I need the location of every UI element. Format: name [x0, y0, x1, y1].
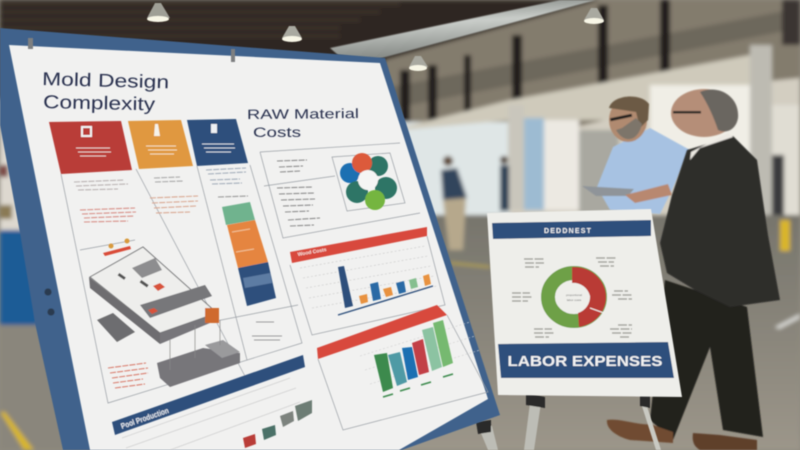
- clipboard and arm: [582, 186, 634, 196]
- pale blue wall section: [400, 122, 510, 222]
- card: red: [49, 121, 132, 174]
- bar chart: material costs: [290, 227, 437, 315]
- stacked bar: [222, 202, 276, 306]
- easel legs: [476, 393, 661, 450]
- column text placeholders: [74, 160, 320, 388]
- donut chart: labor costs: [567, 298, 582, 302]
- shirt: [597, 128, 690, 214]
- card: blue: [187, 119, 248, 166]
- panel: bottom production band: Pool Production: [120, 406, 170, 431]
- poster sheet: [9, 45, 488, 450]
- mini bar chart: [243, 400, 312, 448]
- ceiling: [0, 0, 800, 120]
- left side wall and blue table: [0, 100, 100, 450]
- head: [671, 89, 737, 137]
- heading: raw material costs: Costs: [253, 125, 301, 140]
- yellow bollard: [780, 220, 790, 251]
- sign title bar: [498, 342, 674, 378]
- board clips: [28, 38, 235, 62]
- column guide lines: [61, 143, 488, 430]
- board frame: [0, 28, 500, 450]
- donut chart: [548, 267, 606, 327]
- back wall with dark beams: [385, 0, 800, 170]
- isometric mold diagram: [89, 238, 282, 387]
- flower diagram: [340, 153, 397, 210]
- panel: labor expenses sign: [487, 209, 682, 397]
- jacket: [660, 136, 780, 307]
- ceiling duct: [330, 0, 596, 60]
- card: orange: [128, 120, 193, 169]
- heading: mold design complexity: [42, 68, 169, 114]
- head: [609, 98, 647, 142]
- sign title bar: LABOR EXPENSES: [508, 354, 663, 370]
- donut chart: proportional: [566, 293, 582, 297]
- shoes: [607, 420, 673, 443]
- right man in dark suit: [607, 89, 780, 450]
- ceiling lamps: [147, 3, 604, 71]
- left man in blue shirt: [582, 96, 690, 214]
- board side holes: [44, 288, 54, 316]
- floor right: [385, 215, 800, 450]
- heading: mold design complexity: Mold Design: [42, 68, 169, 92]
- heading: mold design complexity: Complexity: [43, 91, 156, 114]
- sign header bar: DEDDNEST: [544, 228, 592, 235]
- sign header bar: [492, 220, 651, 239]
- background man: [441, 156, 509, 250]
- white wall: [400, 78, 800, 240]
- donut callout notes: [512, 258, 632, 337]
- heading: raw material costs: [247, 106, 359, 140]
- exhibit booth panels: [508, 45, 800, 235]
- heading: raw material costs: RAW Material: [247, 106, 359, 122]
- panel: large poster board: [0, 28, 500, 450]
- legs: [650, 280, 763, 440]
- bar chart: labor cost comparison: [317, 305, 480, 397]
- small reference figure: [252, 322, 282, 340]
- bar chart: material costs: Wood Costs: [297, 247, 327, 258]
- panel: bottom production band: [112, 355, 312, 450]
